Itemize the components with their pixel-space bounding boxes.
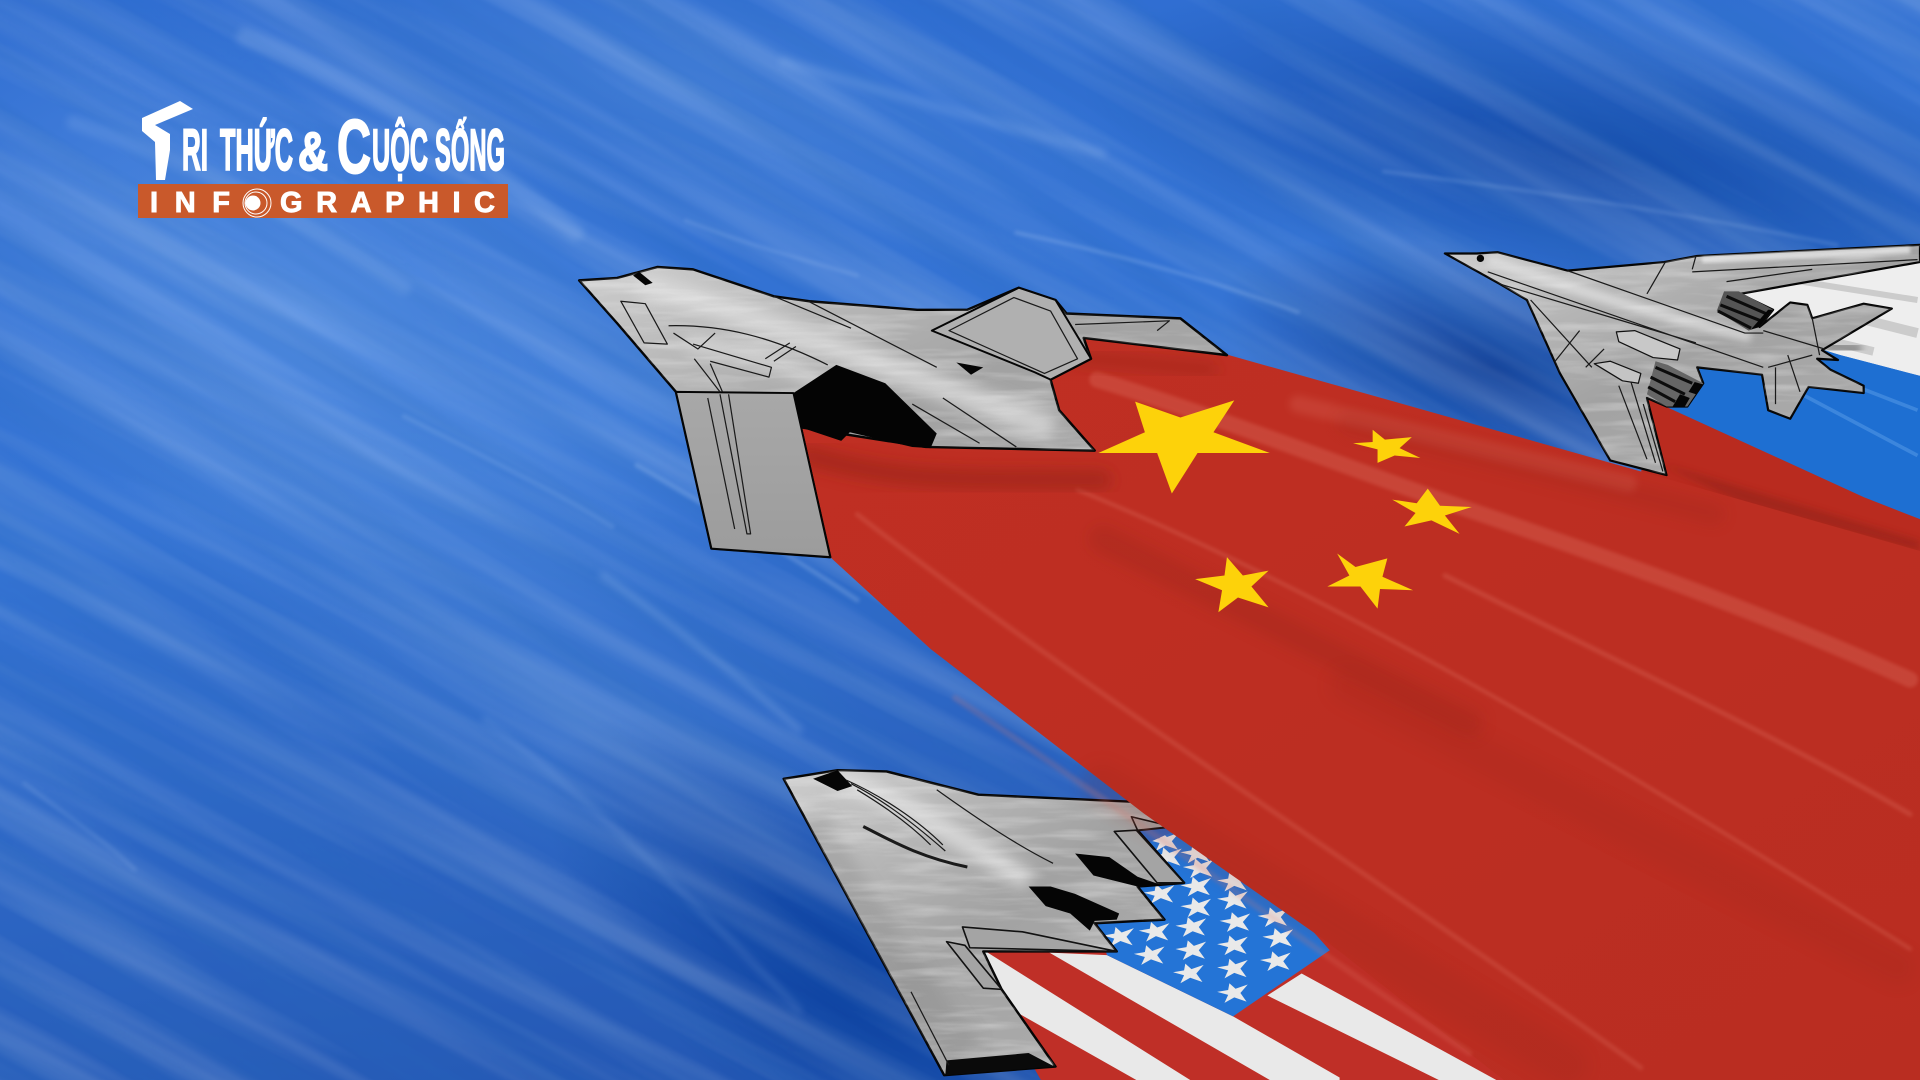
flag highlight streaks (857, 380, 1910, 1068)
flag stars (1103, 831, 1293, 1003)
logo wordmark: RI (182, 118, 208, 183)
plane: Chinese stealth bomber (579, 267, 1227, 557)
logo: Tri Thức & Cuộc Sống Infographic: SỐNG (435, 118, 505, 183)
logo icon: T mark (142, 101, 193, 180)
logo icon: concentric O (243, 189, 271, 217)
panel: Chinese flag (801, 338, 1920, 1080)
flag small star 4 (1327, 553, 1413, 609)
panel: American flag (985, 832, 1504, 1080)
flag large star (1098, 400, 1270, 493)
plane engine pods (1616, 331, 1680, 360)
logo wordmark: UỘC (372, 118, 428, 183)
plane engine intakes (1075, 853, 1162, 887)
logo wordmark: C (337, 105, 371, 190)
flag small star 2 (1392, 489, 1472, 534)
panel: Russian flag (1641, 251, 1920, 553)
plane: US B-2 style flying wing (784, 770, 1184, 1075)
logo infographic bar (138, 184, 508, 218)
logo wordmark (182, 105, 505, 190)
plane wing (676, 392, 830, 557)
plane lower engines (1647, 361, 1703, 407)
logo infographic label (150, 187, 495, 219)
plane cockpit (633, 272, 653, 285)
plane upper engines (1717, 291, 1773, 331)
plane trailing flaps (947, 817, 1184, 989)
logo infographic label: INF (150, 187, 230, 219)
logo wordmark: & (298, 122, 328, 182)
flag stripes (978, 951, 1496, 1080)
flag canton (1098, 832, 1330, 1016)
flag small star 3 (1195, 557, 1269, 612)
logo wordmark: THỨC (220, 118, 293, 183)
plane cockpit (813, 770, 852, 791)
plane cockpit (1477, 255, 1484, 262)
flag small star 1 (1353, 430, 1420, 463)
plane: Russian Tu-160 bomber (1445, 245, 1920, 475)
plane engine shadow (793, 365, 937, 448)
logo infographic label: GRAPHIC (280, 187, 495, 219)
plane tail fin (932, 288, 1091, 380)
